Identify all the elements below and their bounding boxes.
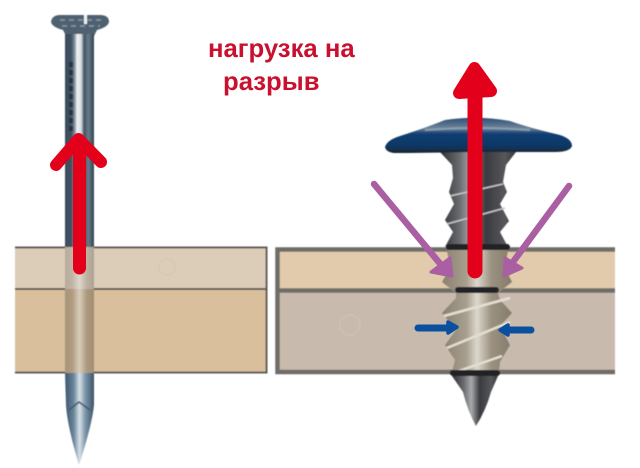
screw inside the boards [442, 250, 512, 372]
left boards [15, 248, 266, 373]
blue arrow right [500, 325, 531, 335]
thread edges [444, 298, 510, 372]
screw cap [385, 118, 572, 153]
blue arrow left [418, 322, 457, 333]
purple arrow right [504, 186, 569, 276]
title: нагрузка на [208, 35, 355, 63]
title: разрыв [223, 68, 319, 96]
screw tip [452, 376, 498, 426]
red arrow: nail [56, 139, 101, 268]
screw shank above the board [440, 152, 516, 247]
right boards [277, 250, 615, 372]
red arrow: screw [459, 68, 491, 271]
screw [385, 118, 572, 426]
title [208, 35, 355, 96]
nail [51, 15, 109, 465]
purple arrow left [374, 184, 452, 276]
screw collars [449, 247, 507, 373]
